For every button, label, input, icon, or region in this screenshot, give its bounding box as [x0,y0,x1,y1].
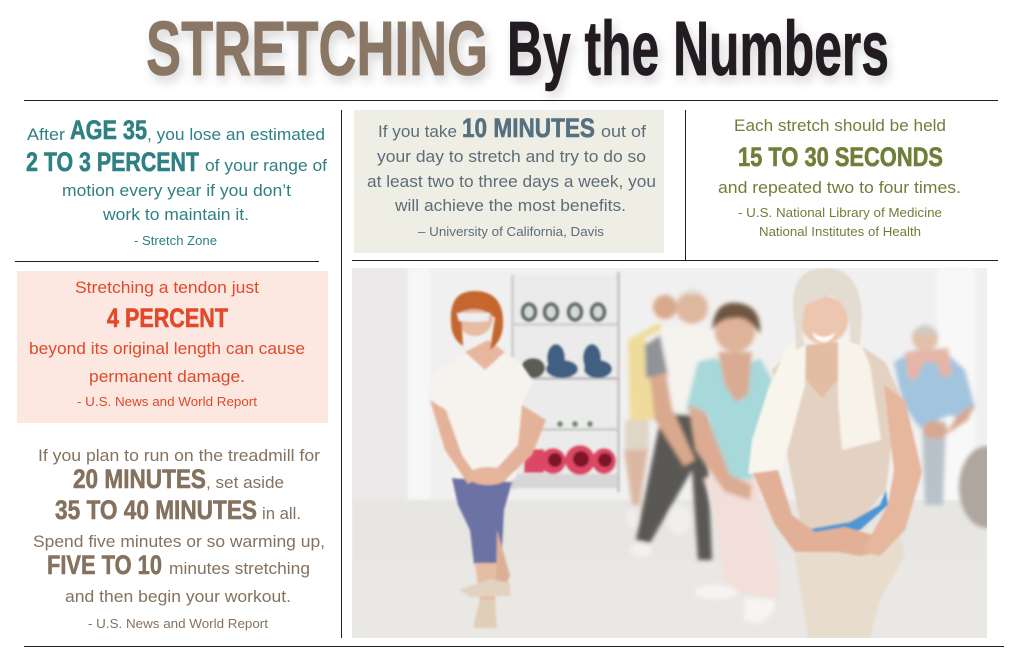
panel: stretch hold time: Each stretch should be held [734,116,946,135]
panel: stretch hold time: 15 TO 30 SECONDS [738,142,943,172]
panel: treadmill warm up: 20 MINUTES [73,464,206,494]
panel: stretch hold time: National Institutes of Health [759,225,921,239]
photo: seniors stretching in a studio [352,268,1015,638]
panel: age 35 range of motion: AGE 35 [70,115,147,145]
person: woman in teal shirt [686,303,778,624]
exercise ball [956,444,987,530]
person: woman in white shirt with leggings [427,291,546,628]
panel: ten minutes: If you take [378,122,457,141]
panel: ten minutes [354,110,664,253]
title [146,6,889,92]
panel: stretch hold time [718,116,961,239]
panel: age 35 range of motion: , you lose an estimated [147,125,325,144]
panel: age 35 range of motion: 2 TO 3 PERCENT [26,147,199,177]
panel: ten minutes: your day to stretch and try to do so [377,147,646,166]
panel: ten minutes: – University of California, Davis [418,225,604,239]
panel: age 35 range of motion: After [27,125,65,144]
panel: tendon warning: permanent damage. [89,367,245,386]
panel: treadmill warm up: - U.S. News and World Report [88,617,269,631]
panel: stretch hold time: and repeated two to four times. [718,178,961,197]
panel: age 35 range of motion: of your range of [205,156,327,175]
panel: stretch hold time: - U.S. National Library of Medicine [738,206,942,220]
panel: treadmill warm up: If you plan to run on the treadmill for [38,446,320,465]
panel: tendon warning: beyond its original length can cause [29,339,305,358]
panel: treadmill warm up: in all. [262,504,301,523]
panel: treadmill warm up: and then begin your workout. [65,587,291,606]
panel: age 35 range of motion [26,115,327,248]
panel: ten minutes: will achieve the most benefits. [394,196,626,215]
panel: ten minutes: out of [601,122,646,141]
panel: ten minutes: at least two to three days a week, you [367,172,656,191]
title: STRETCHING [146,6,488,92]
panel: tendon warning: 4 PERCENT [107,303,228,333]
panel: treadmill warm up: Spend five minutes or so warming up, [33,532,325,551]
panel: treadmill warm up: 35 TO 40 MINUTES [55,495,257,525]
panel: treadmill warm up: minutes stretching [169,559,310,578]
panel: age 35 range of motion: motion every year if you don’t [62,181,291,200]
panel: tendon warning [17,271,328,423]
panel: treadmill warm up: FIVE TO 10 [47,550,162,580]
panel: tendon warning: - U.S. News and World Report [77,395,258,409]
person: smiling woman in front with towel [748,268,922,638]
panel: ten minutes: 10 MINUTES [462,113,595,143]
shelf and gym gear [511,272,620,492]
person: men at the back [624,288,720,560]
panel: treadmill warm up [33,446,325,631]
panel: tendon warning: Stretching a tendon just [75,278,259,297]
panel: age 35 range of motion: - Stretch Zone [134,234,217,248]
panel: age 35 range of motion: work to maintain it. [102,205,249,224]
person: man in blue at back right [894,325,975,505]
panel: treadmill warm up: , set aside [206,473,284,492]
